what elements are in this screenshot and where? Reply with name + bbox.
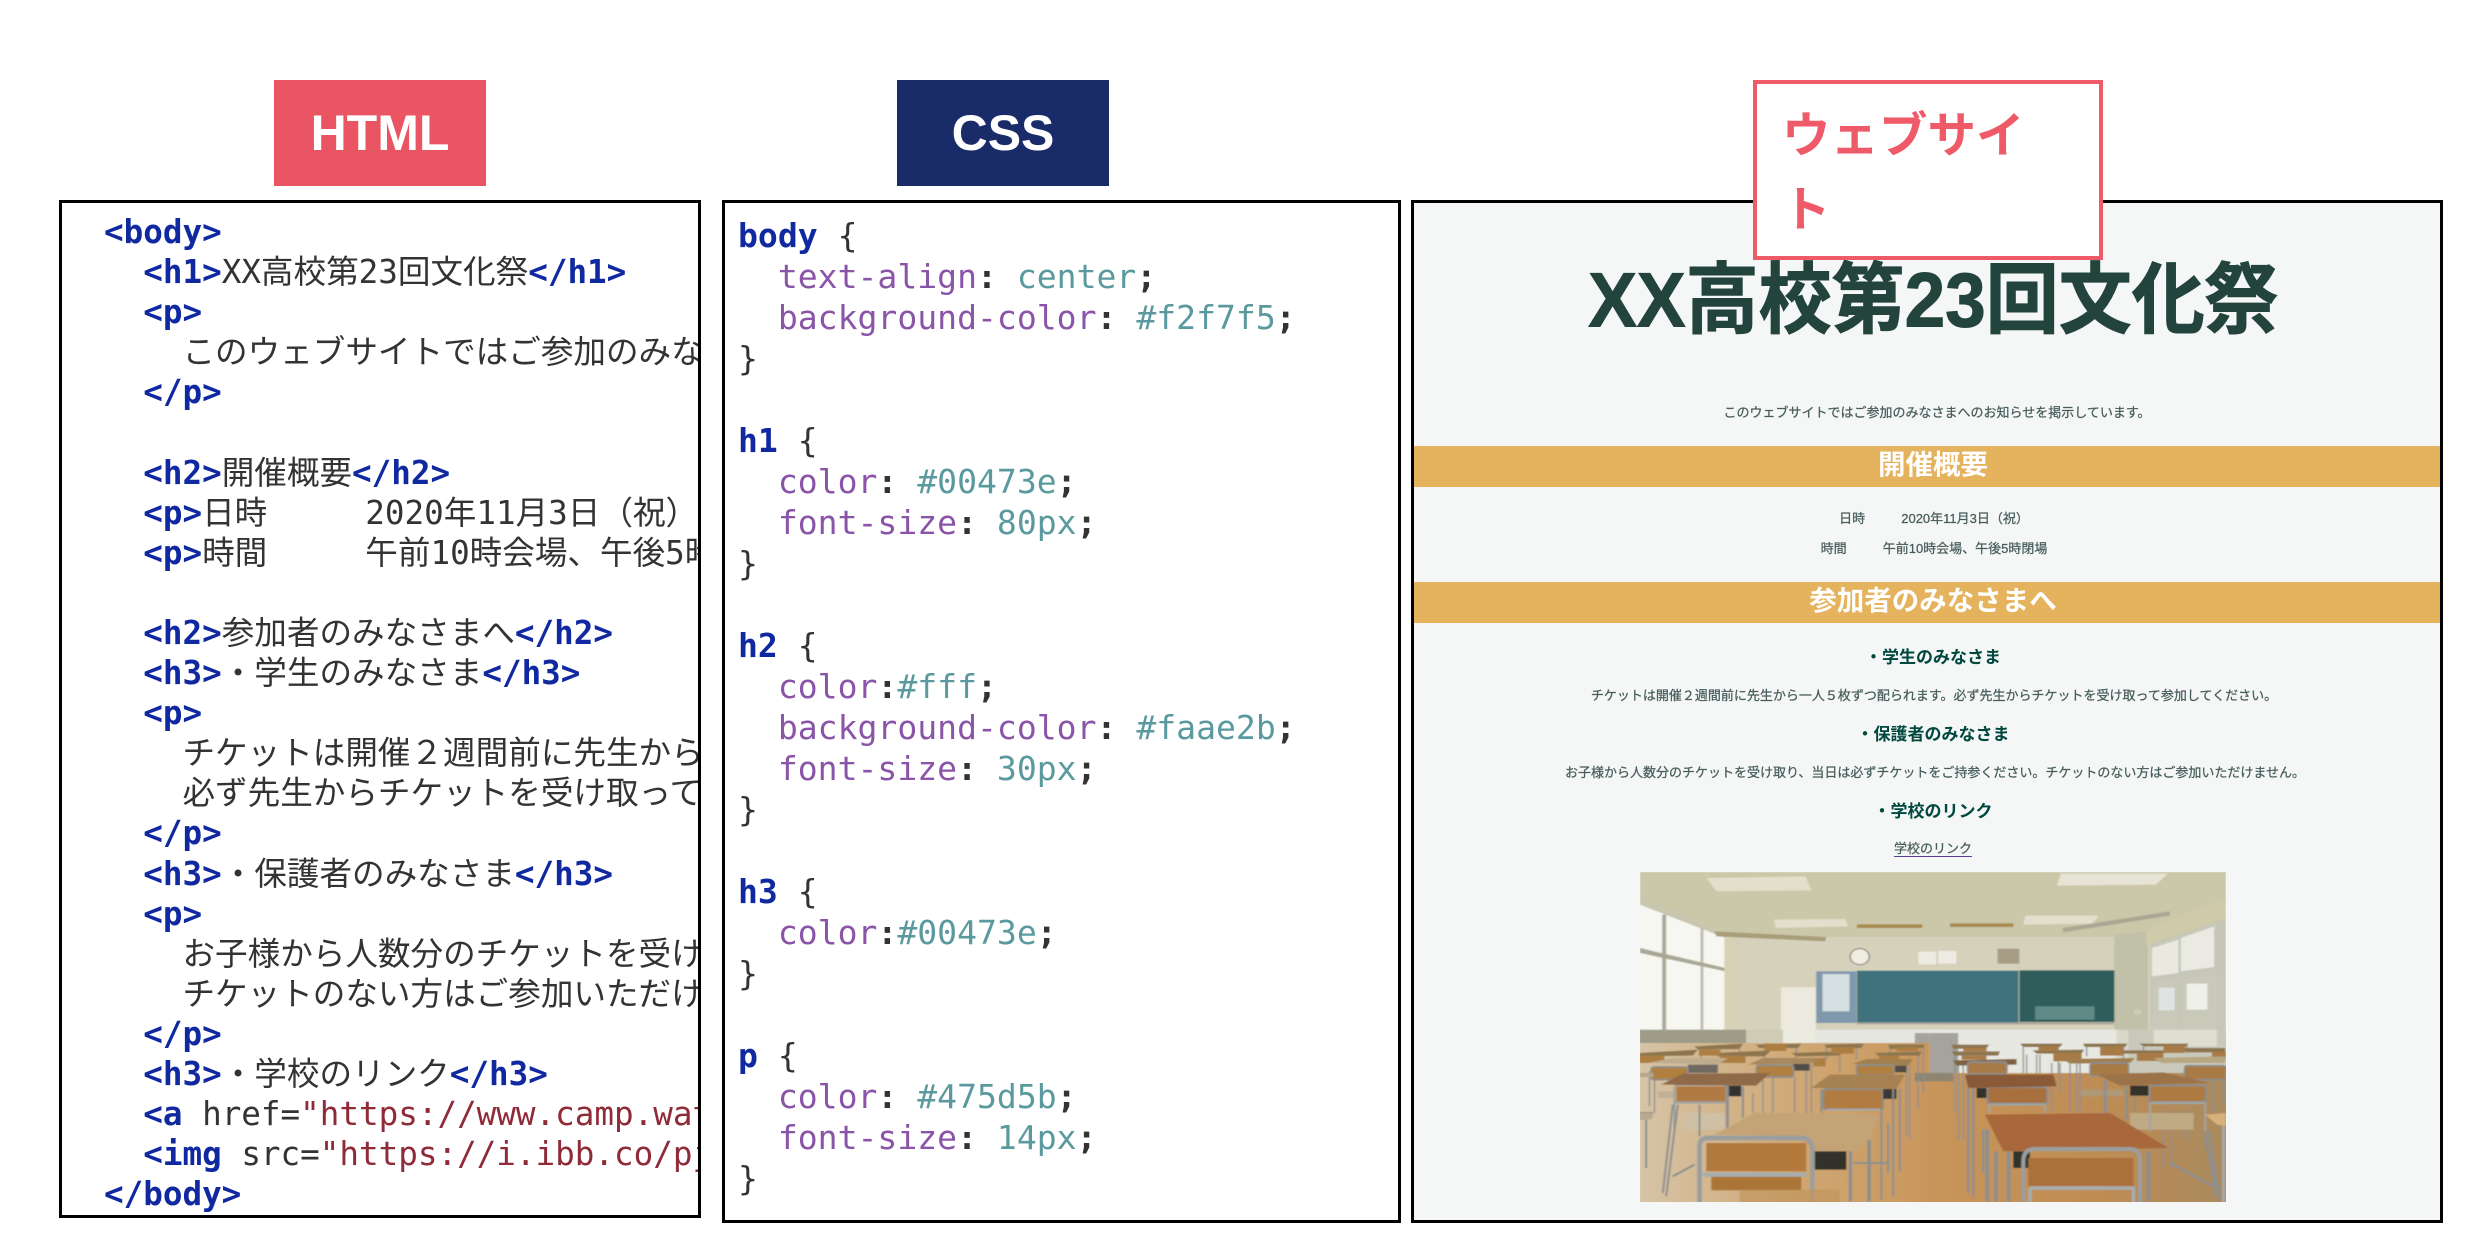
subheading: guardians: ・保護者のみなさま bbox=[1856, 724, 2010, 744]
heading: participants: 参加者のみなさまへ bbox=[1809, 585, 2057, 616]
panel: HTML code bbox=[59, 200, 701, 1218]
subheading: students: ・学生のみなさま bbox=[1865, 648, 2001, 666]
guardians text: お子様から人数分のチケットを受け取り、当日は必ずチケットをご持参ください。チケットのない方はご参加いただけません。 bbox=[1565, 765, 2305, 780]
heading bar: participants bbox=[1414, 582, 2442, 623]
label: HTML bbox=[274, 80, 486, 186]
lower left half of the room bbox=[1639, 1030, 1942, 1206]
label: HTML: HTML bbox=[311, 105, 449, 161]
date line: 日時 2020年11月3日（祝） bbox=[1839, 510, 2029, 526]
heading: event overview: 開催概要 bbox=[1878, 449, 1988, 480]
label: CSS: CSS bbox=[952, 105, 1054, 161]
lower right half of the room bbox=[1930, 1030, 2227, 1206]
students text: チケットは開催２週間前に先生から一人５枚ずつ配られます。必ず先生からチケットを受け取って参加してください。 bbox=[1591, 688, 2277, 703]
time line: 時間 午前10時会場、午後5時閉場 bbox=[1821, 541, 2047, 556]
subheading: school link: ・学校のリンク bbox=[1874, 802, 1992, 820]
intro text: このウェブサイトではご参加のみなさまへのお知らせを掲示しています。 bbox=[1723, 404, 2151, 420]
code block: CSS source: body { text-align: center; background-color: #f2f7f5; } h1 { color: #00473e; font-size: 80px; } h2 { color:#fff; background-color: #faae2b; font-size: 30px; } h3 { color:#00473e; } p { color: #475d5b; font-size: 14px; } bbox=[738, 216, 1296, 1198]
website title: XX高校第23回文化祭 bbox=[1588, 258, 2278, 343]
label: CSS bbox=[897, 80, 1109, 186]
panel: CSS code bbox=[722, 200, 1401, 1223]
heading bar: event overview bbox=[1414, 446, 2442, 487]
label text: ウェブサイト bbox=[1782, 109, 2025, 237]
panel: website preview bbox=[1411, 200, 2443, 1223]
school link: 学校のリンク bbox=[1894, 841, 1972, 856]
label: website bbox=[1753, 80, 2103, 260]
photo: classroom bbox=[1640, 872, 2226, 1202]
